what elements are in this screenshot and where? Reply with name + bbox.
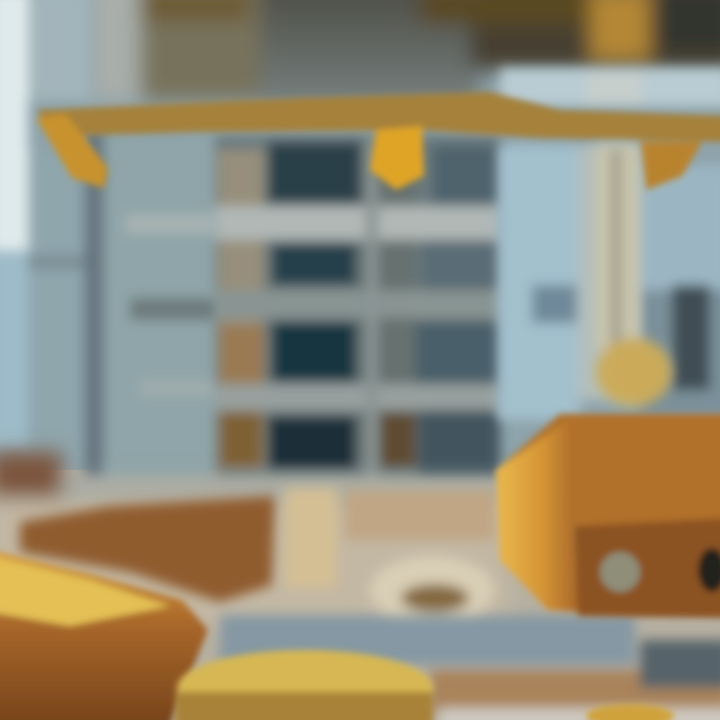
central scaffold tower [215,135,502,480]
model house [496,414,720,618]
foreground round table [175,650,674,720]
left windows [0,0,220,480]
foreground wooden block [0,550,208,720]
lower floor and furniture [0,452,510,630]
right windows [498,68,720,420]
hanging light column [596,145,672,406]
ceiling [90,0,720,105]
wooden crates on the floor [20,488,720,720]
yellow ceiling beam [36,92,720,190]
